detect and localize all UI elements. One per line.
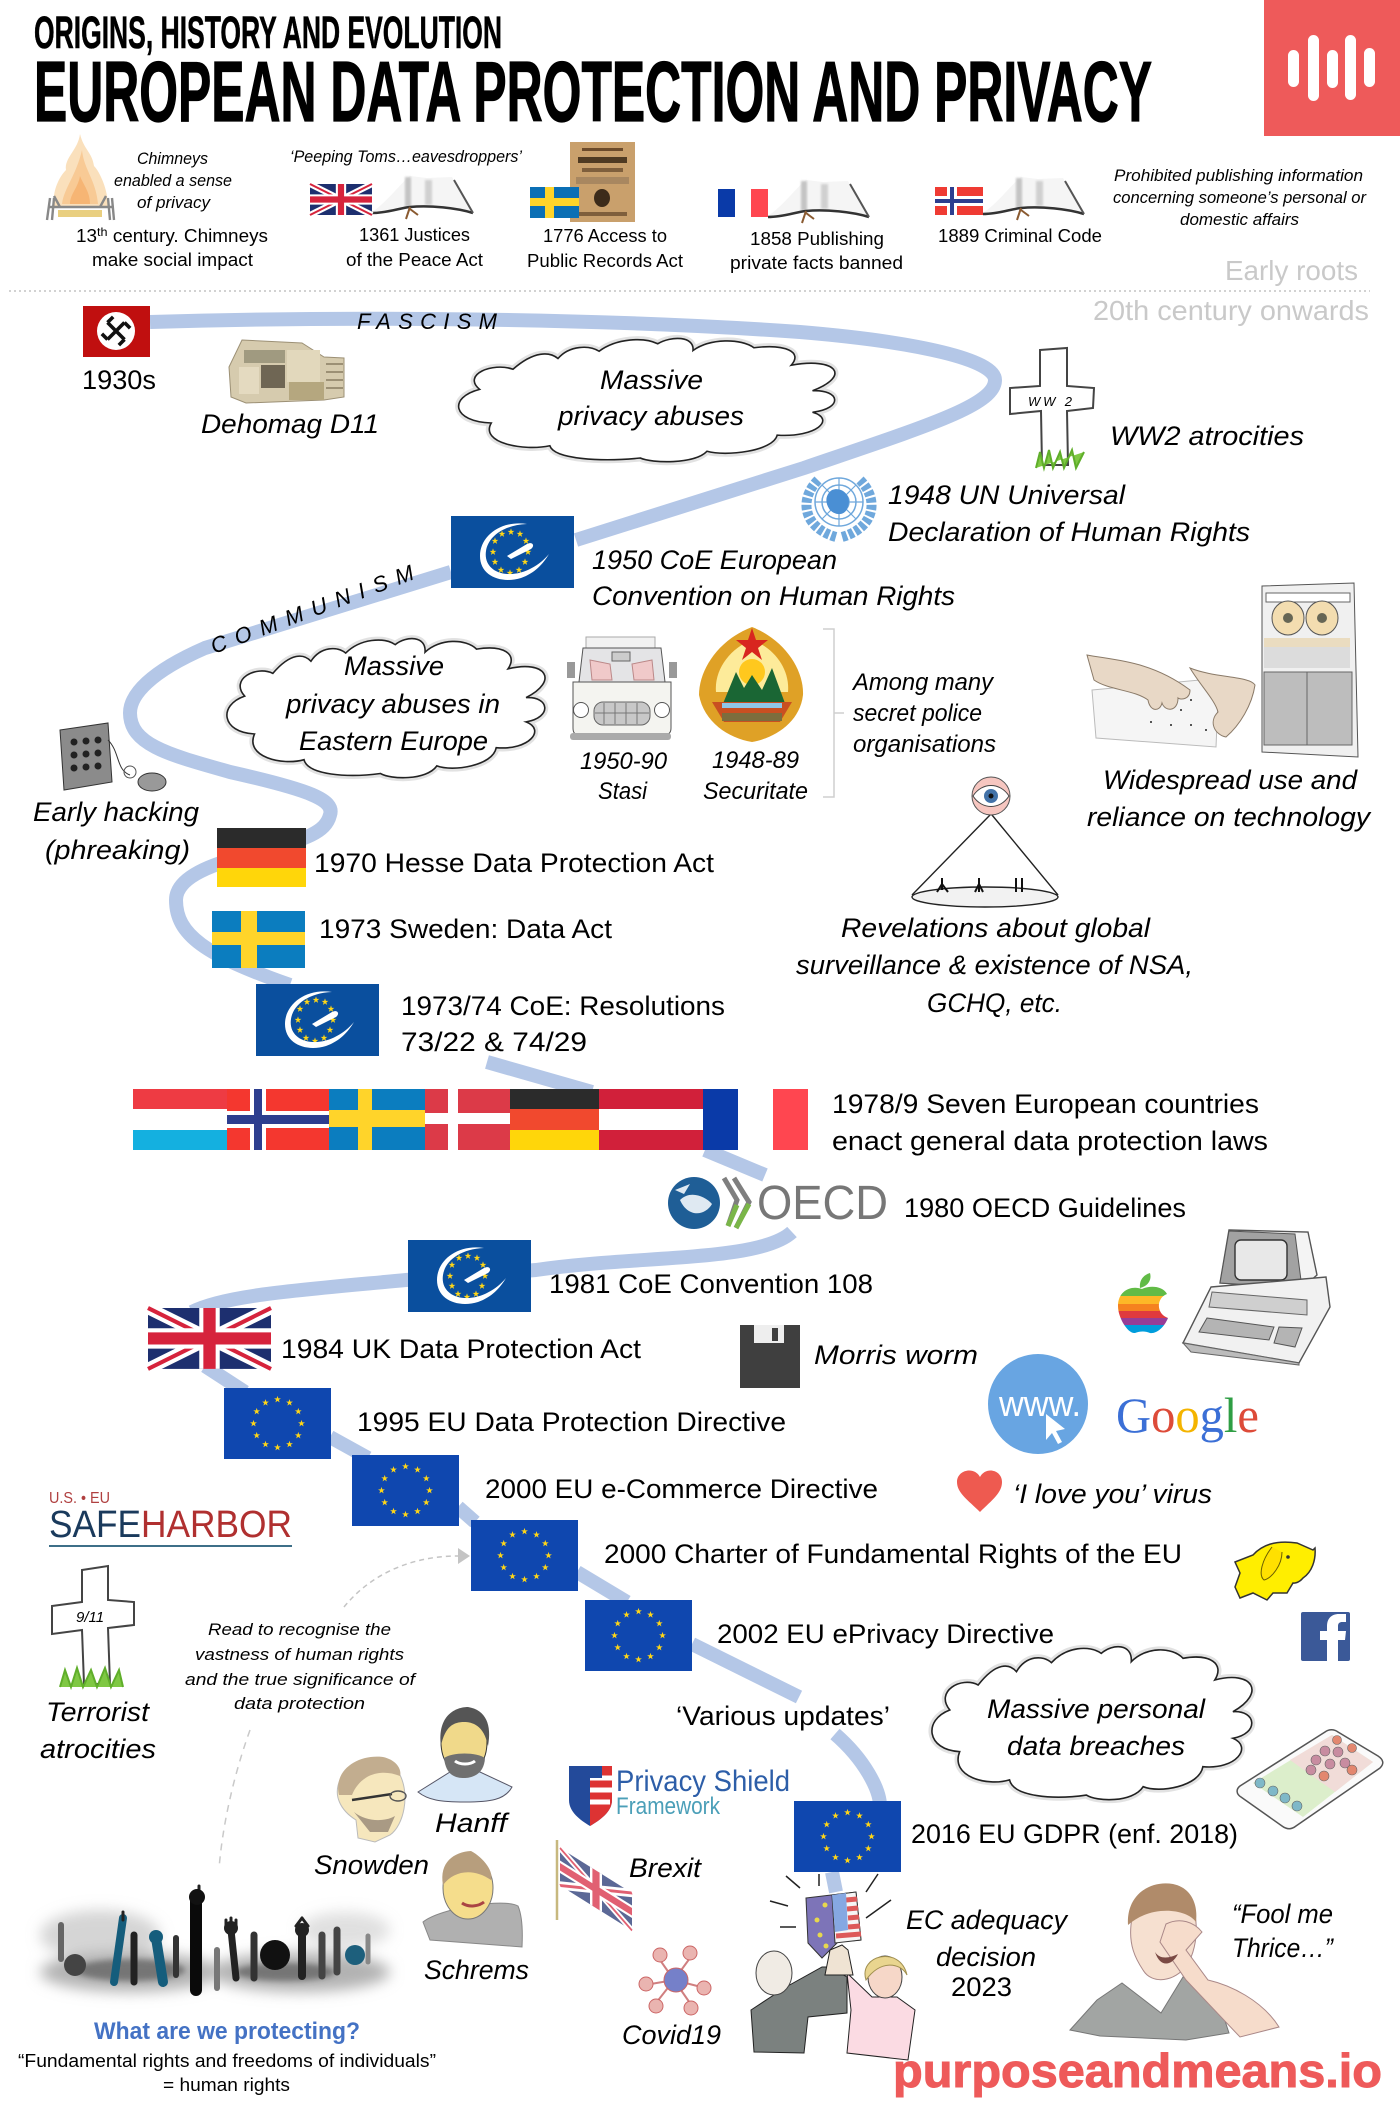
text: 1978/9: 1978/9 Seven European countries — [832, 1089, 1259, 1119]
icon: Facebook — [1301, 1612, 1350, 1661]
text: Hanff: Hanff — [435, 1808, 510, 1838]
text: 1973 Sweden: 1973 Sweden: Data Act — [319, 914, 613, 944]
callout: eastern europe abuses: Eastern Europe — [299, 726, 488, 756]
portrait: Snowden — [337, 1757, 406, 1842]
icon: surveillance eye and cone — [912, 777, 1058, 907]
subtitle: ORIGINS, HISTORY AND EVOLUTION — [34, 7, 502, 58]
flag: EU GDPR — [794, 1801, 901, 1872]
flag: EU Charter — [471, 1520, 578, 1591]
text: revelations: surveillance & existence of NSA, — [796, 950, 1193, 980]
icon: book 1858 — [768, 180, 869, 223]
text: fundamental rights: = human rights — [163, 2075, 290, 2095]
text: 1950 CoE — [592, 545, 955, 611]
text: Covid19: Covid19 — [622, 2020, 721, 2050]
text: Stasi — [580, 748, 668, 805]
portrait: Hanff — [418, 1707, 512, 1802]
text: WW2 atrocities: WW2 atrocities — [1110, 421, 1304, 451]
text: EC adequacy: decision — [936, 1942, 1036, 1972]
text: 1948 UN — [888, 480, 1250, 547]
text: fool me thrice: Thrice…” — [1232, 1933, 1334, 1963]
heading: what are we protecting: What are we protecting? — [94, 2018, 360, 2045]
icon: vintage computer — [1183, 1230, 1330, 1365]
text: prohibited publishing: concerning someone’s personal or — [1113, 189, 1368, 207]
text: early hacking: Early hacking — [33, 797, 199, 827]
text: secret police: organisations — [853, 731, 996, 758]
text: chimneys note: enabled a sense — [114, 172, 232, 190]
text: read to recognise — [185, 1621, 418, 1713]
icon: floppy disk — [740, 1325, 800, 1388]
icon: phreaking device — [60, 723, 166, 791]
icon: covid — [639, 1946, 711, 2015]
text: 1361: of the Peace Act — [346, 250, 483, 270]
text: EC adequacy: EC adequacy — [906, 1905, 1068, 1935]
logo: Privacy Shield: Privacy Shield — [616, 1765, 790, 1798]
icon: hands on punch cards — [1087, 655, 1255, 747]
text: 1978/9 — [832, 1089, 1268, 1156]
text: 1361: 1361 Justices — [359, 225, 470, 245]
logo: safe harbor: U.S. • EU — [49, 1490, 110, 1507]
text: fundamental rights: “Fundamental rights and freedoms of individuals” — [18, 2051, 436, 2071]
callout: massive privacy abuses: Massive — [600, 365, 703, 395]
text: 1776 — [527, 226, 683, 271]
text: Snowden: Snowden — [314, 1850, 429, 1880]
logo: red square with sound bars — [1264, 0, 1400, 136]
flag: Sweden 1973 — [212, 911, 305, 968]
icon: UN logo — [806, 478, 872, 537]
text: 1973/74 — [401, 991, 725, 1057]
callout: eastern europe abuses — [227, 639, 545, 778]
text: 1978/9: enact general data protection laws — [832, 1126, 1268, 1156]
text: charter: 2000 Charter of Fundamental Rights of the EU — [604, 1539, 1182, 1569]
panel: early roots — [47, 134, 1368, 273]
label: communism: COMMUNISM — [207, 560, 418, 659]
text: Morris worm: Morris worm — [814, 1340, 978, 1370]
flag: EU 2000 ecommerce — [352, 1455, 459, 1526]
icon: chimney fire — [47, 134, 114, 220]
icon: book 1889 — [983, 177, 1084, 220]
text: 1930s: 1930s — [82, 365, 156, 395]
text: secret police — [851, 669, 996, 758]
flag: CoE 1981 — [408, 1240, 531, 1312]
callout: data breaches: Massive personal — [987, 1694, 1206, 1724]
label: fascism: FASCISM — [357, 309, 498, 334]
logo: safe harbor: HARBOR — [141, 1504, 292, 1546]
text: Schrems: Schrems — [424, 1955, 529, 1985]
icon: 9/11 cross — [52, 1566, 134, 1687]
logo: Privacy Shield — [569, 1765, 790, 1826]
icon: Apple logo — [1116, 1273, 1170, 1335]
text: prohibited publishing: Prohibited publishing information — [1114, 167, 1363, 185]
text: various updates: ‘Various updates’ — [676, 1701, 890, 1731]
text: 13th century: th — [97, 225, 108, 239]
flag: 1930s — [83, 306, 150, 357]
text: read to recognise: Read to recognise the — [208, 1621, 391, 1639]
icon: Stasi truck — [567, 637, 677, 740]
icon: heart — [957, 1471, 1002, 1512]
text: 1973/74: 1973/74 CoE: Resolutions — [401, 991, 725, 1021]
text: terrorist atrocities: atrocities — [40, 1734, 156, 1764]
logo: OECD — [668, 1177, 888, 1230]
logo: safe harbor — [49, 1490, 292, 1547]
text: revelations — [796, 913, 1193, 1018]
text: terrorist atrocities — [40, 1697, 156, 1764]
flag: France small — [718, 189, 768, 217]
flag: EU 1995 — [224, 1388, 331, 1459]
text: 13th century: century. Chimneys — [108, 226, 268, 246]
text: 1776: 1776 Access to — [543, 226, 667, 246]
illustration: facepalm man — [1070, 1883, 1279, 2040]
text: 1984: 1984 UK Data Protection Act — [281, 1334, 642, 1364]
text: chimneys note — [114, 150, 232, 212]
text: 13th century — [76, 225, 268, 270]
text: GDPR: 2016 EU GDPR (enf. 2018) — [911, 1819, 1238, 1849]
callout: eastern europe abuses: Massive — [344, 651, 444, 681]
logo: OECD: OECD — [757, 1177, 888, 1230]
text: revelations: Revelations about global — [841, 913, 1151, 943]
icon: www circle: www. — [998, 1383, 1081, 1424]
text: peeping toms: ‘Peeping Toms…eavesdroppers’ — [290, 148, 522, 166]
text: Securitate: 1948-89 — [712, 747, 799, 774]
text: Stasi: Stasi — [598, 778, 648, 805]
flag: CoE 1950 — [451, 516, 574, 588]
text: 1981: 1981 CoE Convention 108 — [549, 1269, 873, 1299]
text: secret police: Among many — [851, 669, 995, 696]
text: 1970 Hesse: 1970 Hesse Data Protection Act — [314, 848, 715, 878]
icon: smartphone — [1237, 1730, 1383, 1829]
flag: Norway small — [935, 187, 983, 215]
icon: Hadoop elephant — [1235, 1542, 1315, 1600]
text: EC adequacy: 2023 — [951, 1972, 1012, 2002]
icon: book 1361 — [372, 176, 473, 219]
icon: Securitate crest — [699, 627, 803, 742]
text: 13th century: make social impact — [92, 250, 253, 270]
text: EC adequacy — [906, 1905, 1068, 2002]
text: Brexit: Brexit — [629, 1853, 703, 1883]
text: brand url: purposeandmeans.io — [893, 2044, 1382, 2097]
label: 20th century onwards: 20th century onwards — [1093, 295, 1369, 326]
icon: 9/11 cross: 9/11 — [76, 1609, 104, 1626]
icon: Dehomag machine — [229, 340, 344, 403]
text: terrorist atrocities: Terrorist — [46, 1697, 151, 1727]
text: 1950 CoE: Convention on Human Rights — [592, 581, 955, 611]
text: 1361 — [346, 225, 483, 270]
text: 1995: 1995 EU Data Protection Directive — [357, 1407, 786, 1437]
text: read to recognise: vastness of human rights — [195, 1646, 404, 1664]
text: Stasi: 1950-90 — [580, 748, 668, 775]
label: early roots: Early roots — [1225, 255, 1358, 286]
portrait: Schrems — [423, 1851, 522, 1947]
text: 1858: private facts banned — [730, 253, 903, 273]
text: fundamental rights — [18, 2051, 436, 2095]
icon: old document 1776 — [570, 142, 635, 222]
text: read to recognise: and the true significance of — [185, 1671, 418, 1689]
icon: tape machine — [1262, 583, 1358, 757]
text: 1973/74: 73/22 & 74/29 — [401, 1027, 587, 1057]
text: 13th century: 13 — [76, 226, 96, 246]
text: prohibited publishing: domestic affairs — [1180, 211, 1299, 229]
text: Dehomag D11: Dehomag D11 — [201, 409, 379, 439]
text: widespread use: Widespread use and — [1103, 765, 1358, 795]
text: 1950 CoE: 1950 CoE European — [592, 545, 837, 575]
callout: massive privacy abuses: privacy abuses — [557, 401, 744, 431]
text: secret police: secret police — [853, 700, 982, 727]
text: revelations: GCHQ, etc. — [927, 988, 1062, 1018]
callout: eastern europe abuses: privacy abuses in — [285, 689, 500, 719]
logo: Google: Google — [1116, 1387, 1259, 1443]
flags: seven European countries — [133, 1089, 808, 1150]
text: love you: ‘I love you’ virus — [1013, 1479, 1212, 1509]
callout: data breaches — [932, 1647, 1252, 1800]
text: Securitate: Securitate — [703, 778, 808, 805]
flag: Sweden small — [530, 187, 579, 218]
illustration: crowd with raised hands — [40, 1886, 390, 1992]
callout: data breaches: data breaches — [1007, 1731, 1185, 1761]
logo: Privacy Shield: Framework — [616, 1793, 721, 1820]
flag: Germany — [217, 828, 306, 887]
flag: UK small — [310, 184, 372, 215]
text: 1889: 1889 Criminal Code — [938, 226, 1102, 246]
flag: EU ePrivacy — [585, 1600, 692, 1671]
icon: WW2 cross — [1010, 348, 1094, 468]
text: widespread use: reliance on technology — [1087, 802, 1372, 832]
text: prohibited publishing — [1113, 167, 1368, 229]
text: fool me thrice: “Fool me — [1232, 1899, 1333, 1929]
timeline river — [130, 319, 995, 1892]
text: chimneys note: of privacy — [137, 194, 212, 212]
text: eprivacy: 2002 EU ePrivacy Directive — [717, 1619, 1054, 1649]
text: early hacking: (phreaking) — [45, 835, 190, 865]
icon: Brexit flag — [557, 1840, 632, 1930]
text: 1776: Public Records Act — [527, 251, 683, 271]
text: widespread use — [1087, 765, 1372, 832]
flag: CoE 1973 — [256, 984, 379, 1056]
text: 1980 OECD: 1980 OECD Guidelines — [904, 1193, 1186, 1223]
text: 1948 UN: Declaration of Human Rights — [888, 517, 1250, 547]
text: Securitate — [703, 747, 808, 805]
text: read to recognise: data protection — [234, 1695, 365, 1713]
callout: massive privacy abuses — [459, 338, 835, 462]
text: 2000 ecommerce: 2000 EU e-Commerce Directive — [485, 1474, 878, 1504]
icon: www circle — [988, 1354, 1088, 1454]
logo: safe harbor: SAFE — [49, 1504, 141, 1546]
arrow: dashed to charter — [344, 1548, 470, 1607]
text: chimneys note: Chimneys — [137, 150, 208, 168]
icon: WW2 cross: WW 2 — [1028, 394, 1073, 409]
text: 1858: 1858 Publishing — [750, 229, 884, 249]
text: fool me thrice — [1232, 1899, 1334, 1963]
illustration: EU US adequacy handshake — [751, 1874, 915, 2060]
text: 1858 — [730, 229, 903, 273]
flag: UK 1984 — [148, 1308, 271, 1369]
text: 1948 UN: 1948 UN Universal — [888, 480, 1126, 510]
text: early hacking — [33, 797, 199, 865]
